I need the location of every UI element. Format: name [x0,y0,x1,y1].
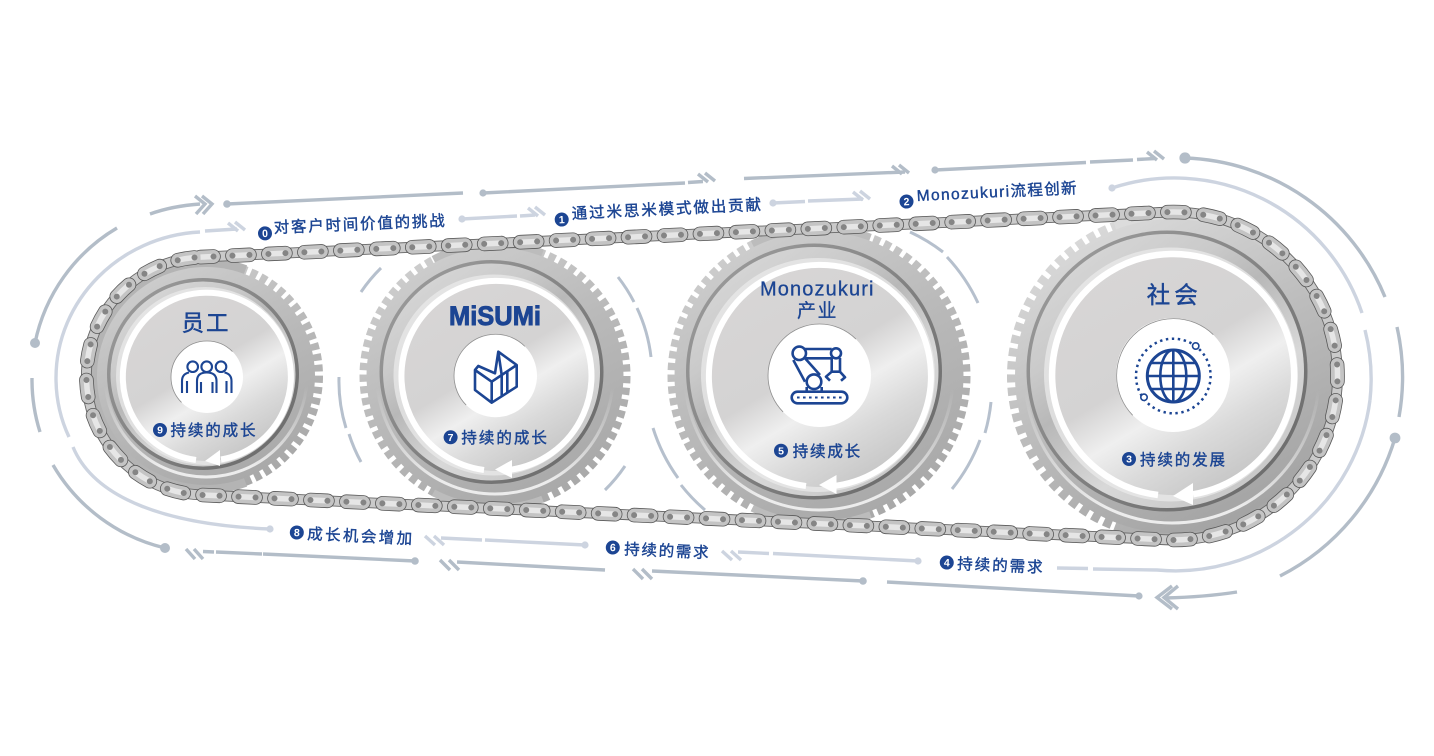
label 3: 持续的发展 [1140,451,1225,469]
label 7: 持续的成长 [461,429,547,447]
gear: Monozukuri industry [672,230,966,522]
label 0: 0 [262,228,268,240]
title: Monozukuri industry: Monozukuri [760,279,874,301]
label 5: 5 [778,445,784,457]
roller chain [86,212,1337,540]
hub [171,341,243,413]
label 0: 对客户时间价值的挑战 [273,212,446,237]
title: Monozukuri industry [760,279,874,322]
label 7: 7 [448,432,454,444]
label 2: 2 [903,196,910,208]
label 5: 持续成长 [793,442,860,460]
arc dashes around gears [339,232,991,510]
title: MISUMI logo: MiSUMi [449,301,541,331]
hub [1116,318,1230,432]
hub [454,334,537,417]
label 3: 3 [1126,454,1132,466]
hub [768,324,871,427]
left guide arcs [30,228,274,553]
icon: robot arm [792,347,847,403]
gear: employees [94,264,318,488]
label 6: 持续的需求 [624,540,709,562]
label 6: 6 [610,542,616,554]
arrow [1173,483,1193,505]
label 4: 4 [944,557,950,569]
icon: boxes [475,352,517,403]
gear: MISUMI [364,246,626,506]
label 1: 1 [559,214,565,226]
title: society: 社会 [1147,282,1198,308]
arrow [819,475,836,494]
flow guide lines: outer and inner tracks [30,151,1403,609]
top guide lines [150,151,1164,231]
gear: society [1012,216,1332,536]
right guide arcs [1057,152,1403,576]
icon: people [182,361,232,393]
label 9: 9 [157,425,163,437]
arrow [205,450,220,466]
label 4: 持续的需求 [957,555,1043,577]
label 1: 通过米思米模式做出贡献 [571,196,761,223]
label 8: 8 [294,527,300,539]
arrow [495,460,512,478]
label 2: Monozukuri流程创新 [916,179,1077,205]
label 8: 成长机会增加 [307,525,413,548]
title: Monozukuri industry: 产业 [797,300,836,322]
bottom guide lines [186,536,1237,609]
label 9: 持续的成长 [170,422,256,440]
title: employees: 员工 [182,311,228,336]
icon: globe [1136,339,1211,413]
